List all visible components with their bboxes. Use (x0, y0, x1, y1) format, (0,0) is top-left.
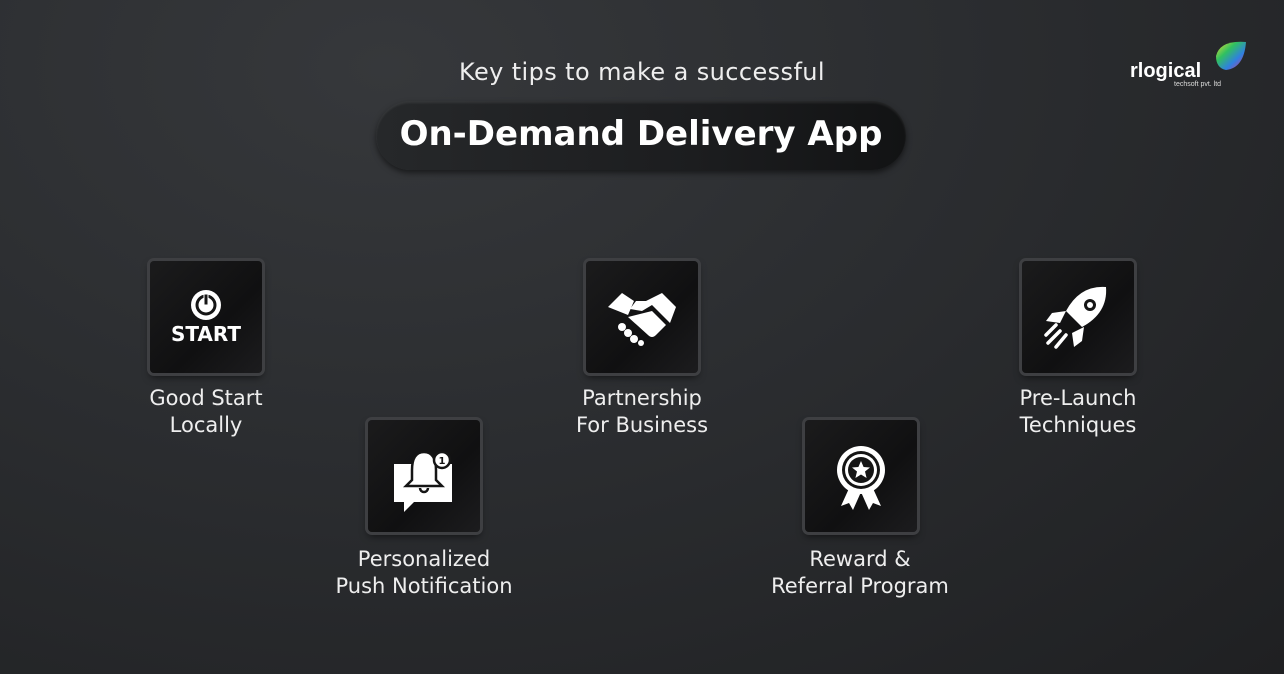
tile: push notification: 1 (439, 456, 446, 467)
label: push notification: Personalized (358, 547, 490, 571)
logo: rlogical (1130, 60, 1201, 82)
label: rocket: Techniques (1020, 413, 1136, 437)
label: rocket (1019, 386, 1136, 437)
logo: techsoft pvt. ltd (1174, 81, 1221, 88)
tile: push notification (368, 420, 480, 532)
label: good start locally: Good Start (149, 386, 263, 410)
tile: partnership (586, 261, 698, 373)
tile: good start locally (150, 261, 262, 373)
label: good start locally: Locally (170, 413, 242, 437)
label: push notification (335, 547, 513, 598)
label: partnership: Partnership (582, 386, 702, 410)
subtitle: Key tips to make a successful (459, 58, 825, 86)
label: reward: Reward & (809, 547, 911, 571)
tile: good start locally: START (171, 322, 241, 346)
label: push notification: Push Notification (335, 574, 513, 598)
label: partnership: For Business (576, 413, 708, 437)
tile: reward (805, 420, 917, 532)
title pill: On-Demand Delivery App (400, 114, 882, 154)
tile: rocket (1022, 261, 1134, 373)
label: rocket: Pre-Launch (1019, 386, 1136, 410)
label: reward: Referral Program (771, 574, 949, 598)
label: good start locally (149, 386, 263, 437)
label: partnership (576, 386, 708, 437)
logo (1130, 42, 1246, 88)
label: reward (771, 547, 949, 598)
title pill (376, 101, 906, 170)
